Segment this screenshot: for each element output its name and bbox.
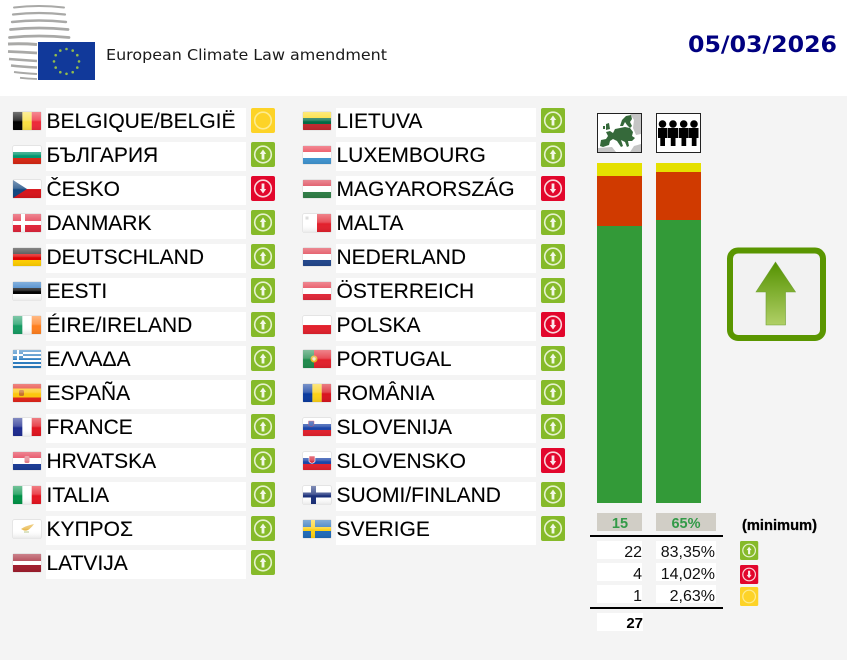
row: Malta: MALTA <box>336 212 404 235</box>
row: against: 14,02% <box>661 566 715 583</box>
row: France: FRANCE <box>46 416 133 439</box>
row: Spain: ESPAÑA <box>46 380 131 405</box>
chart: member states bar <box>597 163 642 503</box>
row: Hungary <box>303 176 565 205</box>
row: Lithuania <box>303 108 565 137</box>
row: Poland: POLSKA <box>336 314 421 337</box>
row: Cyprus: ΚΥΠΡΟΣ <box>46 518 133 541</box>
threshold: member states: 15 <box>612 516 628 532</box>
row: Netherlands: NEDERLAND <box>336 246 466 269</box>
row: against <box>597 563 758 584</box>
row: Luxembourg <box>303 142 565 171</box>
row: Cyprus <box>13 516 275 545</box>
row: Latvia <box>13 550 275 579</box>
row: Hungary: MAGYARORSZÁG <box>336 176 515 201</box>
row: Netherlands <box>303 244 565 273</box>
row: Malta <box>303 210 565 239</box>
row: abstain <box>597 585 758 606</box>
row: Lithuania: LIETUVA <box>336 110 423 133</box>
row: in favour: 83,35% <box>661 544 715 561</box>
row: Italy: ITALIA <box>46 484 110 507</box>
row: Germany <box>13 244 275 273</box>
row: in favour <box>597 541 758 561</box>
chart: population bar <box>656 163 701 503</box>
row: total <box>597 613 643 632</box>
summary table <box>590 535 758 632</box>
row: Slovakia: SLOVENSKO <box>336 450 466 473</box>
row: Estonia: EESTI <box>46 280 107 303</box>
icon: EU map <box>598 114 642 152</box>
row: Spain <box>13 380 275 409</box>
header band <box>0 0 847 96</box>
row: Portugal: PORTUGAL <box>336 348 452 371</box>
threshold: member states <box>597 513 642 532</box>
row: Romania: ROMÂNIA <box>336 380 435 405</box>
row: Romania <box>303 380 565 409</box>
row: Ireland <box>13 312 275 341</box>
row: Slovenia: SLOVENIJA <box>336 416 453 439</box>
row: Czechia: ČESKO <box>46 176 120 201</box>
row: Germany: DEUTSCHLAND <box>46 246 204 269</box>
row: Estonia <box>13 278 275 307</box>
icon: population <box>656 114 700 152</box>
date: 05/03/2026 <box>688 33 837 58</box>
row: Austria <box>303 278 565 307</box>
row: Slovakia <box>303 448 565 477</box>
row: Poland <box>303 312 565 341</box>
panel: left country column <box>13 108 275 579</box>
row: abstain: 2,63% <box>670 588 715 605</box>
row: Sweden <box>303 516 565 545</box>
row: Portugal <box>303 346 565 375</box>
EU flag <box>38 42 95 80</box>
row: Finland: SUOMI/FINLAND <box>336 484 501 507</box>
row: in favour: 22 <box>624 544 642 561</box>
row: Slovenia <box>303 414 565 443</box>
row: France <box>13 414 275 443</box>
row: Croatia <box>13 448 275 477</box>
row: against: 4 <box>633 566 642 583</box>
row: Bulgaria <box>13 142 275 171</box>
row: Czechia <box>13 176 275 205</box>
row: Ireland: ÉIRE/IRELAND <box>46 312 192 337</box>
logo: Council of the EU <box>8 6 95 80</box>
row: Finland <box>303 482 565 511</box>
row: Bulgaria: БЪЛГАРИЯ <box>46 144 158 167</box>
row: Sweden: SVERIGE <box>336 518 430 541</box>
row: Belgique: BELGIQUE/BELGIË <box>46 109 236 133</box>
threshold: population <box>656 513 716 532</box>
row: Italy <box>13 482 275 511</box>
row: Denmark: DANMARK <box>46 212 151 235</box>
icon: large result arrow <box>730 250 823 338</box>
row: total: 27 <box>626 615 643 632</box>
panel: right country column <box>303 108 565 545</box>
row: Belgique <box>13 108 275 137</box>
minimum label: (minimum) <box>742 517 817 534</box>
row: Greece <box>13 346 275 375</box>
row: Austria: ÖSTERREICH <box>336 279 474 303</box>
row: Croatia: HRVATSKA <box>46 450 157 473</box>
row: Luxembourg: LUXEMBOURG <box>336 144 486 167</box>
row: Denmark <box>13 210 275 239</box>
row: Latvia: LATVIJA <box>46 552 129 575</box>
threshold: population: 65% <box>671 516 701 532</box>
row: abstain: 1 <box>633 588 642 605</box>
row: Greece: ΕΛΛΑΔΑ <box>46 348 131 371</box>
title: European Climate Law amendment <box>106 46 387 64</box>
